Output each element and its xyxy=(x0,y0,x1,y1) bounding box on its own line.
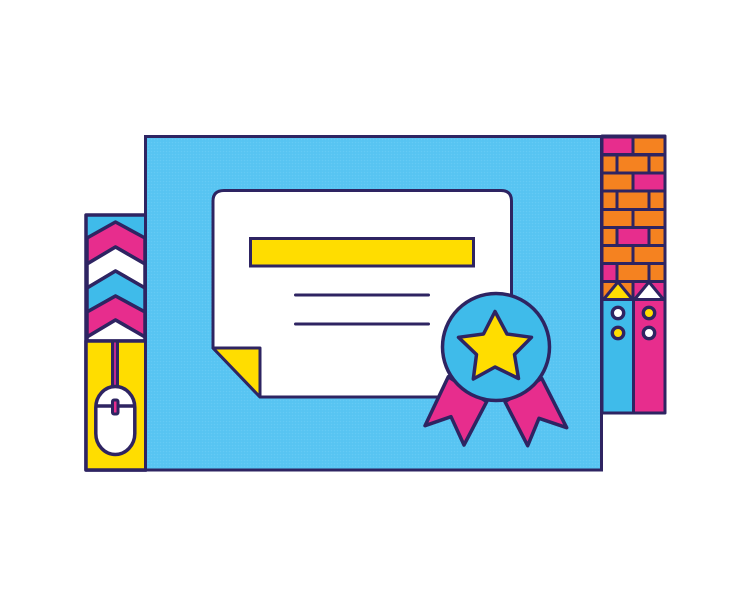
text line 1 xyxy=(296,294,428,296)
brick rows xyxy=(602,137,665,300)
panel: main blue background xyxy=(146,136,602,470)
yellow mouse panel xyxy=(86,341,146,470)
star xyxy=(458,312,532,379)
tower: pink with white arrow xyxy=(634,282,665,413)
left ribbon xyxy=(425,377,487,445)
chevron: white lower xyxy=(87,320,145,341)
chevron: pink top xyxy=(87,222,145,264)
award badge xyxy=(425,294,567,446)
tower: blue with yellow arrow xyxy=(602,282,634,413)
chevron: blue xyxy=(87,271,145,312)
medal circle xyxy=(442,294,550,400)
text line 2 xyxy=(296,322,428,326)
panel: right brick wall xyxy=(602,136,665,413)
folded corner xyxy=(213,348,260,397)
certificate sheet xyxy=(213,190,512,397)
yellow title bar xyxy=(250,238,474,266)
chevron: pink lower xyxy=(87,296,145,337)
chevron: white upper xyxy=(87,247,145,288)
panel: left column with chevrons and mouse xyxy=(86,215,146,470)
right ribbon xyxy=(505,378,567,446)
icon: computer mouse xyxy=(96,341,135,454)
